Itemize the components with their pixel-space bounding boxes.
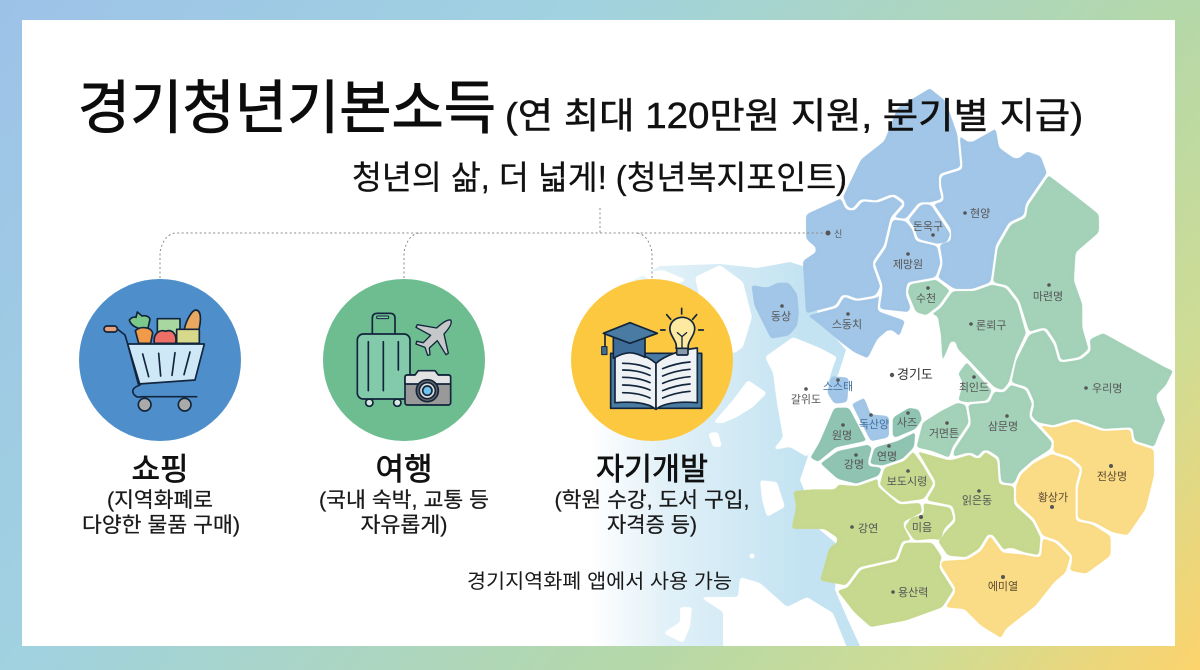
text: self development detail	[554, 489, 750, 537]
text: travel detail: (국내 숙박, 교통 등	[319, 489, 489, 512]
region labels: 연명	[877, 450, 897, 463]
region labels: 원명	[832, 429, 852, 442]
region labels: 갈위도	[791, 392, 821, 406]
region labels	[771, 207, 1127, 599]
subtitle: 청년의 삶, 더 넓게! (청년복지포인트)	[352, 159, 847, 196]
map: Gyeonggi regions	[590, 87, 1175, 660]
text: travel detail	[319, 489, 489, 537]
region labels: 독산양	[859, 418, 889, 431]
southern olive regions	[790, 449, 1042, 628]
region polygons	[750, 87, 1175, 640]
region labels: 강연	[858, 522, 878, 535]
text: travel detail: 자유롭게)	[360, 514, 448, 537]
region labels: 미음	[912, 521, 932, 534]
region labels: 마련명	[1033, 290, 1063, 303]
northern blue regions	[750, 87, 1048, 443]
region labels: 읽은동	[962, 494, 992, 507]
title: 경기청년기본소득	[78, 76, 496, 141]
central green regions	[907, 173, 1175, 485]
text: self development detail: (학원 수강, 도서 구입,	[554, 489, 750, 512]
region labels: 동상	[771, 310, 791, 323]
region labels: 신	[834, 229, 842, 239]
region labels: 스동치	[832, 318, 862, 331]
region labels: 스스태	[823, 380, 853, 393]
region labels: 사즈	[897, 416, 917, 429]
region labels: 현양	[970, 207, 990, 220]
heading: self development: 자기개발	[596, 452, 708, 487]
region labels: 강명	[844, 458, 864, 471]
text: self development detail: 자격증 등)	[607, 514, 697, 537]
panel: self development	[554, 279, 750, 537]
region labels: 황상가	[1038, 491, 1068, 504]
region labels: 론뢰구	[976, 319, 1006, 332]
icon: suitcase, plane, camera	[323, 279, 485, 441]
region labels: 수천	[916, 291, 936, 305]
region labels: 우리명	[1092, 382, 1122, 395]
region labels: 제망원	[893, 258, 923, 271]
western teal regions	[808, 407, 923, 485]
sea and coast	[611, 262, 860, 646]
region labels: 거면튼	[929, 427, 959, 440]
region labels: 경기도	[897, 367, 933, 382]
region labels: 삼문명	[988, 420, 1018, 433]
title note: (연 최대 120만원 지원, 분기별 지급)	[505, 95, 1083, 136]
region labels: 용산력	[898, 586, 928, 599]
region labels: 보도시령	[887, 475, 927, 488]
panel: shopping	[79, 279, 241, 537]
region labels: 최인드	[959, 381, 989, 394]
region labels: 돈옥구	[913, 220, 943, 233]
icon: shopping cart	[79, 279, 241, 441]
dotted connector lines	[160, 208, 826, 278]
heading: shopping: 쇼핑	[131, 452, 189, 487]
south-east yellow regions	[940, 420, 1155, 640]
region labels: 전상명	[1097, 470, 1127, 483]
region labels: 에미열	[988, 580, 1018, 593]
text: shopping detail: 다양한 물품 구매)	[82, 514, 240, 537]
footnote: 경기지역화폐 앱에서 사용 가능	[467, 570, 732, 593]
heading: travel: 여행	[375, 452, 433, 487]
icon: book, graduation cap, light bulb	[571, 279, 733, 441]
text: shopping detail	[82, 489, 240, 537]
text: shopping detail: (지역화폐로	[107, 489, 213, 512]
panel: travel	[319, 279, 489, 537]
